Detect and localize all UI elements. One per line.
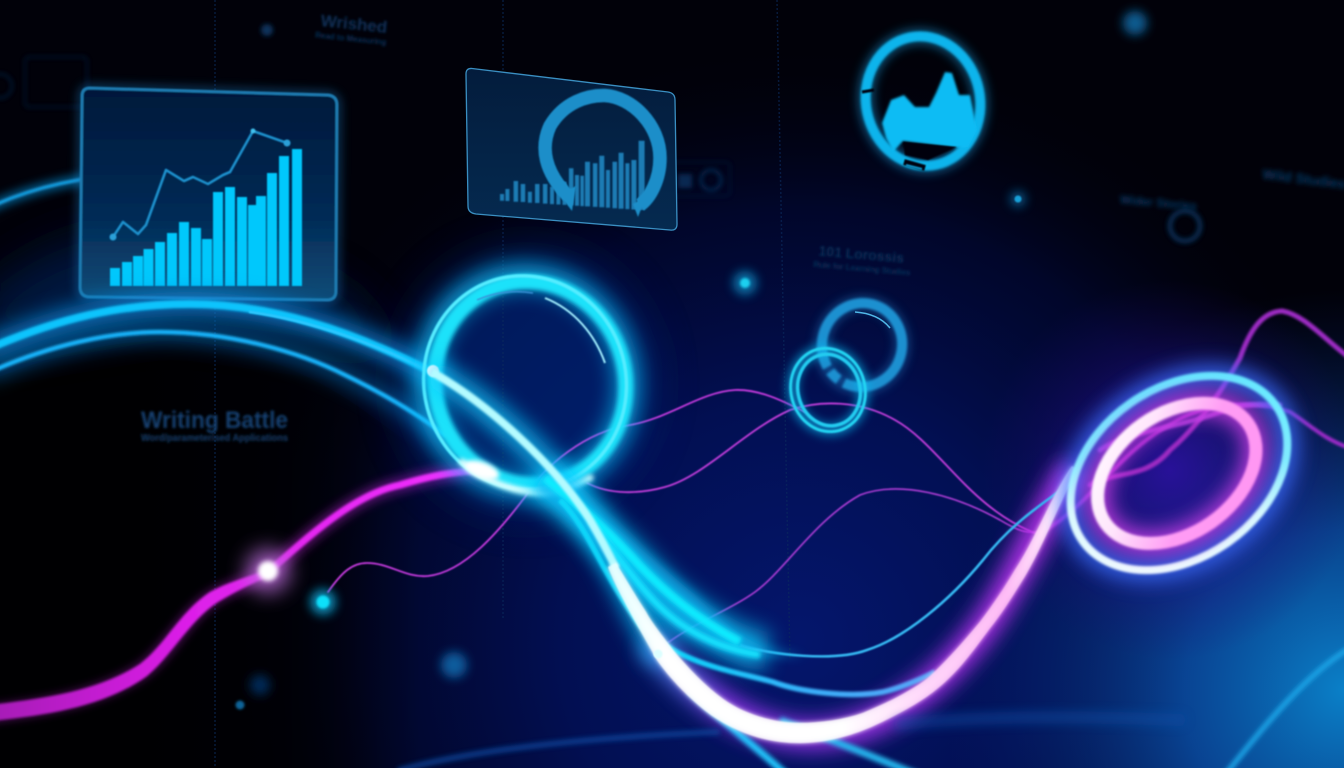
cyan band B	[560, 500, 935, 694]
blurred label: 101 Lorossis: Rule for Learning Studies	[813, 260, 911, 277]
small linked rings	[781, 294, 912, 440]
panel: gauge with bars	[466, 68, 677, 230]
pink inner ring	[1071, 374, 1282, 572]
cyan band C	[690, 690, 790, 768]
blurred label: 101 Lorossis: 101 Lorossis	[818, 242, 905, 266]
blurred label: Wrished: Wrished	[320, 11, 388, 37]
bright tip	[654, 650, 662, 658]
ring highlights	[545, 298, 605, 363]
bright node	[246, 549, 290, 593]
cyan band A strands	[545, 478, 740, 642]
thin blue continuation	[740, 480, 1075, 656]
cyan band A haze	[535, 470, 805, 656]
faint vertical grid lines	[215, 0, 790, 768]
blurred label: Writing Battle: Word/parameterised Applications	[141, 433, 288, 444]
blurred label: Wrished	[315, 11, 389, 47]
bars: rising columns	[110, 149, 302, 286]
magenta stream with bright node	[0, 470, 485, 721]
blurred labels: top right	[1119, 166, 1344, 213]
cyan dot start of thin line	[310, 589, 336, 615]
blurred label: 101 Lorossis	[813, 242, 913, 277]
large cyan ring	[400, 253, 651, 512]
thin purple data lines	[328, 311, 1344, 645]
lower blurred streams	[400, 648, 1344, 768]
cyan arc streams left	[0, 304, 445, 435]
blurred label: Writing Battle: Writing Battle	[141, 407, 288, 434]
gauge bars	[500, 141, 645, 210]
ribbon: glowing cyan and white waves	[432, 372, 1078, 768]
small floating dots	[236, 11, 1147, 710]
neon oval rings	[1034, 336, 1324, 610]
gauge arc	[545, 95, 660, 217]
blurred labels: top right: Wider Stories	[1119, 192, 1198, 213]
main light band	[432, 372, 616, 568]
ring hot point	[427, 365, 439, 377]
trend line	[110, 128, 290, 240]
faint background widgets	[0, 57, 1200, 241]
blurred label: Wrished: Read to Measuring	[315, 31, 387, 47]
upper left faint cyan stream	[0, 174, 135, 207]
panel: rising bar and line chart	[80, 88, 337, 300]
icon: circular skyline badge	[854, 26, 992, 176]
